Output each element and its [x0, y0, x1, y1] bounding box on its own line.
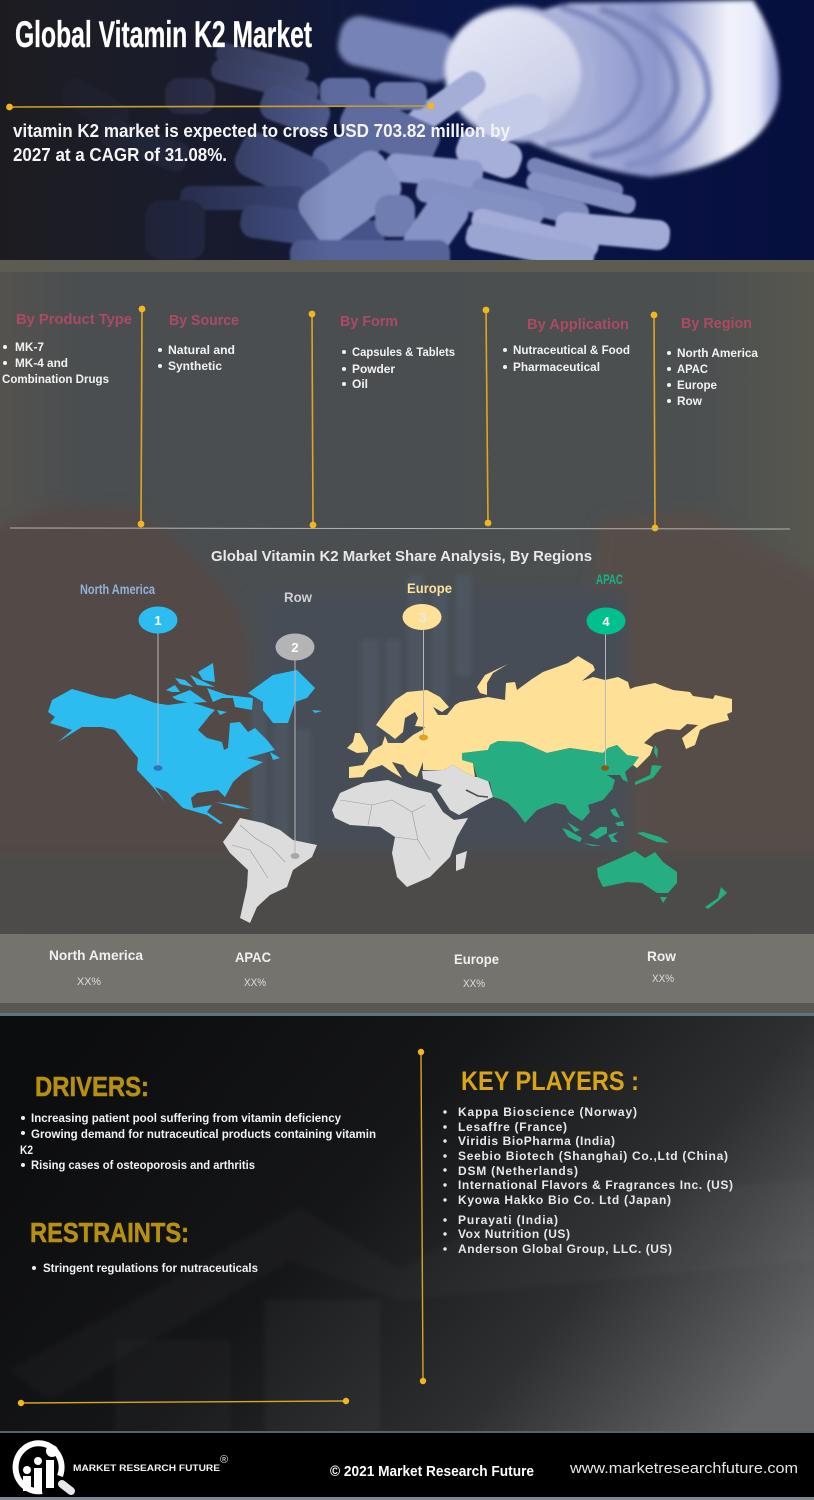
- pills pile: [102, 42, 672, 260]
- share strip: europe: [454, 951, 499, 990]
- share strip: north america: XX%: [77, 976, 101, 988]
- panel: footer: [0, 1431, 814, 1500]
- pin 3: europe: Europe: [407, 580, 452, 596]
- lower vertical gold rule: [418, 1049, 426, 1384]
- share strip: apac: [235, 949, 271, 989]
- panel: by form: [340, 313, 455, 391]
- share strip: north america: [49, 947, 143, 988]
- map: africa and middle east: [332, 765, 493, 887]
- share strip: europe: Europe: [454, 951, 499, 967]
- panel: by product type: MK-7: [15, 340, 44, 354]
- pin 1: north america: [80, 581, 178, 771]
- lower horizontal gold rule: [18, 1398, 349, 1406]
- restraints list: Stringent regulations for nutraceuticals: [43, 1261, 258, 1275]
- bottle cap behind bottle: [334, 12, 460, 86]
- drivers heading: DRIVERS:: [35, 1071, 149, 1102]
- registered mark: ®: [220, 1454, 228, 1466]
- panel: by form: Oil: [352, 377, 368, 391]
- icon: logo magnifier with bars: [16, 1443, 71, 1491]
- intro text: vitamin K2 market is expected to cross USD 703.82 million by: [13, 121, 510, 141]
- panel: by region: [667, 315, 758, 408]
- key players heading: KEY PLAYERS :: [461, 1066, 639, 1096]
- panel: by region: APAC: [677, 362, 708, 376]
- panel: by application: Pharmaceutical: [513, 360, 600, 374]
- drivers list: Increasing patient pool suffering from vitamin deficiency: [31, 1111, 341, 1125]
- key players list: International Flavors & Fragrances Inc. (US): [458, 1178, 733, 1192]
- pin 2: rest of world: Row: [284, 589, 312, 605]
- panel: by source: Synthetic: [168, 359, 222, 373]
- map section heading: Global Vitamin K2 Market Share Analysis, By Regions: [211, 548, 592, 565]
- share strip: apac: APAC: [235, 949, 271, 965]
- map: north america: [48, 663, 322, 824]
- drivers list: Growing demand for nutraceutical products containing vitamin: [31, 1127, 376, 1141]
- panel: by region: North America: [677, 346, 758, 360]
- map: asia pacific: [462, 741, 727, 909]
- restraints heading: RESTRAINTS:: [30, 1217, 189, 1248]
- key players list: Lesaffre (France): [458, 1120, 567, 1134]
- panel: by region: By Region: [681, 315, 752, 332]
- header gold rule: [6, 103, 434, 110]
- panel: by application: By Application: [527, 316, 629, 333]
- pin 3: europe: [402, 580, 452, 740]
- key players list: Anderson Global Group, LLC. (US): [458, 1242, 672, 1256]
- share strip: row: Row: [647, 948, 676, 964]
- world map: [48, 656, 732, 923]
- panel: by application: [503, 316, 630, 374]
- share strip: europe: XX%: [463, 978, 485, 990]
- panel: by region: Europe: [677, 378, 717, 392]
- share strip: row: [647, 948, 676, 985]
- title: Global Vitamin K2 Market: [15, 14, 312, 55]
- panel: by product type: MK-4 and: [15, 356, 68, 370]
- panel: by product type: [2, 311, 132, 386]
- pin 2: rest of world: [276, 589, 314, 859]
- panel: by region: Row: [677, 394, 703, 408]
- panel: by application: Nutraceutical & Food: [513, 343, 630, 357]
- key players list: Seebio Biotech (Shanghai) Co.,Ltd (China): [458, 1149, 728, 1163]
- panel: by form: By Form: [340, 313, 398, 330]
- panel: by source: Natural and: [168, 343, 235, 357]
- key players list: DSM (Netherlands): [458, 1164, 578, 1178]
- panel: segmentation and map background: [0, 260, 814, 1016]
- intro text: 2027 at a CAGR of 31.08%.: [13, 145, 227, 165]
- key players list: Kappa Bioscience (Norway): [458, 1105, 637, 1119]
- panel: by form: Powder: [352, 362, 395, 376]
- drivers list: K2: [20, 1143, 33, 1157]
- website: www.marketresearchfuture.com: [569, 1460, 798, 1477]
- pin 4: apac: 4: [602, 614, 610, 629]
- pin 3: europe: 3: [419, 610, 427, 625]
- panel: header banner with pill photo: [0, 0, 814, 273]
- panel: by product type: Combination Drugs: [2, 372, 109, 386]
- icon: pill bottle: [433, 0, 779, 177]
- key players list: [443, 1105, 733, 1256]
- share strip: apac: XX%: [244, 977, 266, 989]
- map: south america: [223, 818, 317, 923]
- panel: by source: [158, 312, 239, 373]
- share strip: north america: North America: [49, 947, 143, 963]
- panel: by product type: By Product Type: [16, 311, 132, 328]
- panel: by source: By Source: [169, 312, 239, 329]
- key players list: Kyowa Hakko Bio Co. Ltd (Japan): [458, 1193, 671, 1207]
- pin 1: north america: 1: [154, 613, 162, 628]
- intro text: [13, 121, 510, 165]
- copyright: © 2021 Market Research Future: [330, 1463, 534, 1480]
- key players list: Purayati (India): [458, 1213, 558, 1227]
- brand name: MARKET RESEARCH FUTURE: [73, 1463, 220, 1474]
- pin 4: apac: APAC: [596, 571, 623, 587]
- panel: drivers, restraints and key players background: [0, 1016, 814, 1432]
- pin 4: apac: [586, 571, 626, 771]
- drivers list: [20, 1111, 376, 1172]
- pin 2: rest of world: 2: [291, 640, 299, 655]
- map: europe and russia: [347, 656, 732, 778]
- drivers list: Rising cases of osteoporosis and arthritis: [31, 1158, 255, 1172]
- pin 1: north america: North America: [80, 581, 155, 597]
- share strip: row: XX%: [652, 973, 674, 985]
- vertical gold dividers: [138, 306, 658, 531]
- panel: by form: Capsules & Tablets: [352, 345, 455, 359]
- key players list: Vox Nutrition (US): [458, 1227, 570, 1241]
- key players list: Viridis BioPharma (India): [458, 1134, 615, 1148]
